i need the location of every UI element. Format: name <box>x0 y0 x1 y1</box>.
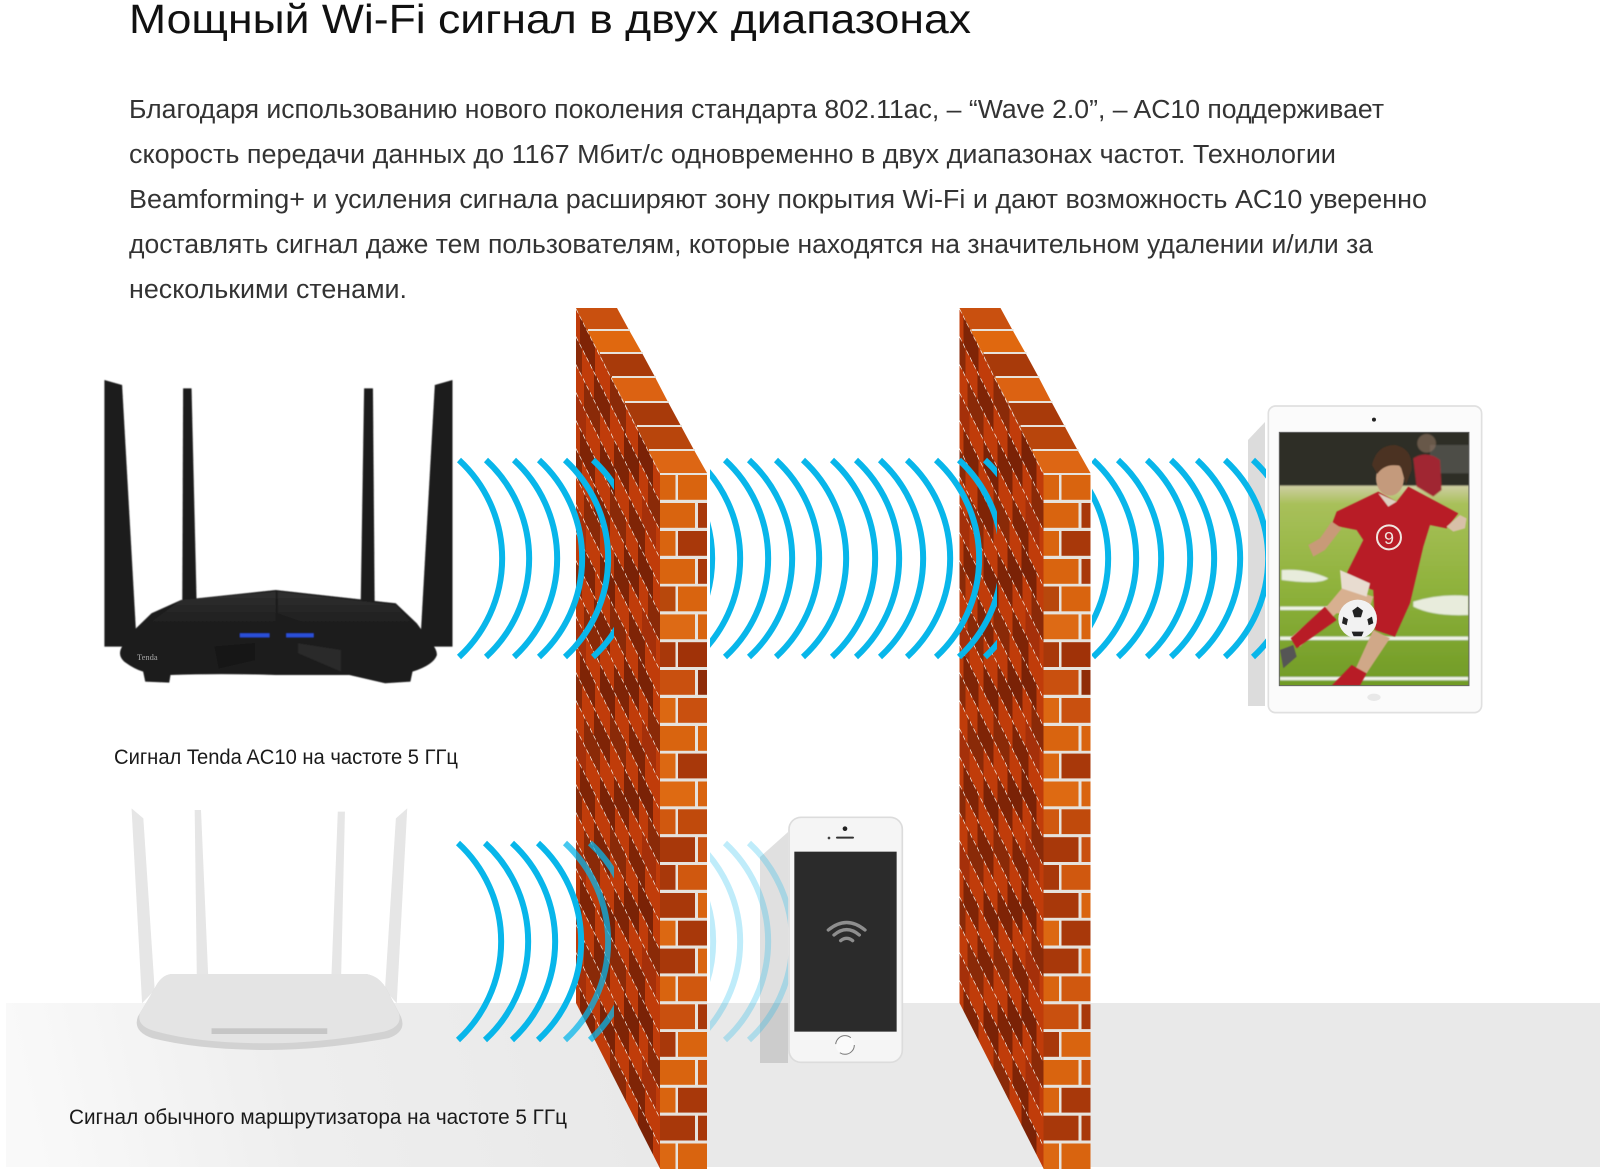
description paragraph: Благодаря использованию нового поколения стандарта 802.11ac, – “Wave 2.0”, – AC10 поддерживает <box>129 96 1384 124</box>
white router antennas <box>132 808 407 1003</box>
tablet shadow <box>1248 422 1265 706</box>
wall front face <box>660 473 707 1169</box>
description paragraph: Beamforming+ и усиления сигнала расширяют зону покрытия Wi-Fi и дают возможность AC10 уверенно <box>129 186 1427 214</box>
caption: Tenda AC10: Сигнал Tenda AC10 на частоте 5 ГГц <box>114 746 458 769</box>
icon: tablet camera <box>1372 418 1376 422</box>
leg right <box>1355 630 1390 673</box>
white router <box>132 808 407 1050</box>
white router body <box>137 974 403 1050</box>
icon: home button <box>836 1036 854 1054</box>
router antennas <box>104 380 452 647</box>
background player <box>1413 455 1442 497</box>
description paragraph: доставлять сигнал даже тем пользователям, которые находятся на значительном удалении и/или за <box>129 231 1374 259</box>
signal waves: Tenda to wall 1 <box>459 460 636 657</box>
signal waves: ordinary router to wall 1 <box>458 843 633 1040</box>
faded signal waves: wall 1 to phone <box>710 840 788 1042</box>
phone shadow <box>760 832 788 1063</box>
jersey number: 9 <box>1384 528 1394 548</box>
smartphone <box>789 817 902 1062</box>
black router <box>104 380 452 683</box>
caption: ordinary router: Сигнал обычного маршрутизатора на частоте 5 ГГц <box>69 1106 567 1129</box>
floor band <box>6 1003 1600 1167</box>
wall side face <box>576 308 660 1168</box>
description paragraph: скорость передачи данных до 1167 Мбит/с одновременно в двух диапазонах частот. Технологии <box>129 141 1336 169</box>
icon: wifi <box>828 922 865 941</box>
icon: tablet home button <box>1367 694 1381 701</box>
router brand label: Tenda <box>137 652 158 662</box>
jersey <box>1332 487 1458 637</box>
icon: phone camera and speaker <box>828 826 854 839</box>
description paragraph: несколькими стенами. <box>129 276 407 304</box>
football <box>1338 600 1377 638</box>
description paragraph <box>129 96 1427 304</box>
signal waves: between walls <box>710 458 997 660</box>
tablet <box>1268 406 1482 713</box>
phone screen <box>794 852 897 1032</box>
brick wall 2 <box>960 308 1090 1169</box>
wall top face <box>576 308 707 473</box>
arms <box>1308 522 1342 557</box>
tablet screen photo: football player <box>1277 430 1472 688</box>
router body <box>120 590 437 683</box>
leg left <box>1292 587 1373 647</box>
brick wall 1 <box>576 308 707 1169</box>
jersey number <box>1377 525 1401 549</box>
signal waves: wall 2 to tablet <box>1092 458 1266 660</box>
head <box>1376 461 1404 496</box>
